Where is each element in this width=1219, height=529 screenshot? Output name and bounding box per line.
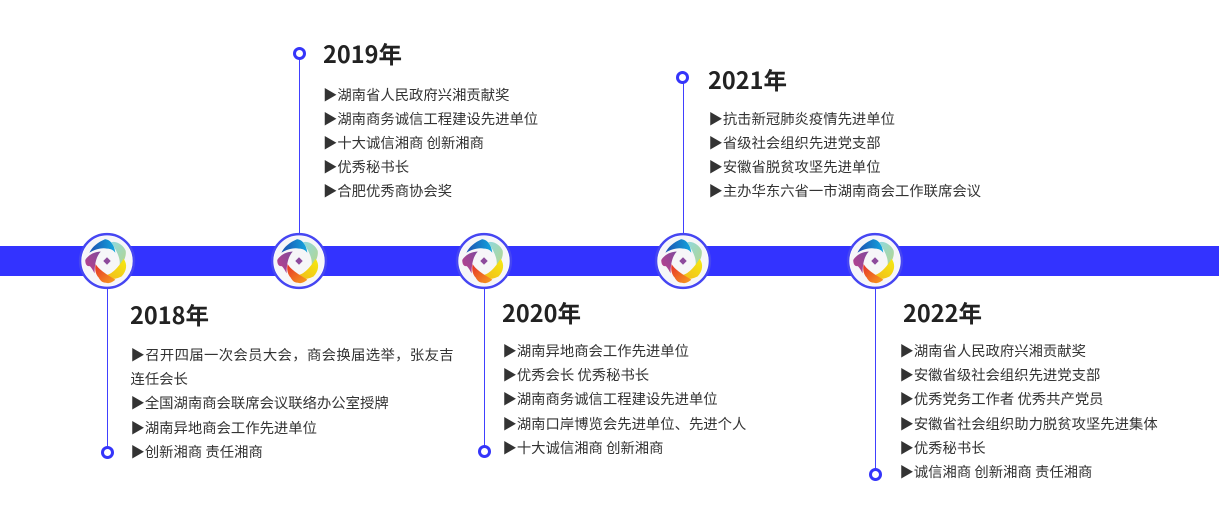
stem: 2018 [107, 285, 108, 447]
text block: 2022 awards: ▶安徽省级社会组织先进党支部 [900, 364, 1100, 385]
marker dot: 2018 [101, 446, 114, 459]
text block: 2021 awards: ▶省级社会组织先进党支部 [708, 132, 881, 153]
heading: 2021: 2021年 [708, 62, 787, 96]
text block: 2018 awards: ▶召开四届一次会员大会，商会换届选举，张友吉 [130, 344, 454, 365]
marker dot: 2021 [676, 71, 689, 84]
marker dot: 2020 [478, 445, 490, 458]
text block: 2022 awards: ▶安徽省社会组织助力脱贫攻坚先进集体 [900, 413, 1158, 434]
text block: 2022 awards: ▶优秀党务工作者 优秀共产党员 [900, 388, 1104, 409]
text block: 2020 awards [502, 340, 746, 458]
text block: 2021 awards: ▶安徽省脱贫攻坚先进单位 [708, 156, 881, 177]
text block: 2021 awards: ▶主办华东六省一市湖南商会工作联席会议 [708, 180, 981, 201]
text block: 2018 awards [130, 344, 454, 462]
text block: 2019 awards: ▶十大诚信湘商 创新湘商 [323, 132, 484, 153]
text block: 2019 awards [323, 84, 538, 201]
icon: logo 2021 [655, 232, 711, 290]
icon: logo 2022 [847, 232, 903, 290]
text block: 2019 awards: ▶合肥优秀商协会奖 [323, 180, 452, 201]
text block: 2022 awards: ▶诚信湘商 创新湘商 责任湘商 [900, 461, 1092, 482]
icon: logo 2019 [271, 232, 327, 290]
text block: 2018 awards: 连任会长 [130, 368, 188, 389]
heading: 2020: 2020年 [502, 295, 581, 329]
text block: 2020 awards: ▶湖南商务诚信工程建设先进单位 [502, 388, 718, 409]
heading: 2019: 2019年 [323, 36, 402, 70]
text block: 2020 awards: ▶湖南口岸博览会先进单位、先进个人 [502, 413, 746, 434]
icon: logo 2020 [456, 232, 512, 290]
text block: 2022 awards [900, 340, 1158, 482]
marker dot: 2022 [868, 468, 882, 481]
heading: 2022: 2022年 [903, 295, 982, 329]
text block: 2022 awards: ▶湖南省人民政府兴湘贡献奖 [900, 340, 1086, 361]
heading: 2018: 2018年 [130, 297, 209, 331]
text block: 2018 awards: ▶创新湘商 责任湘商 [130, 441, 263, 462]
text block: 2020 awards: ▶十大诚信湘商 创新湘商 [502, 437, 664, 458]
timeline bar [0, 246, 1219, 276]
text block: 2019 awards: ▶湖南省人民政府兴湘贡献奖 [323, 84, 509, 105]
stem: 2021 [683, 78, 684, 236]
text block: 2022 awards: ▶优秀秘书长 [900, 437, 986, 458]
icon: logo 2018 [79, 232, 135, 290]
text block: 2020 awards: ▶优秀会长 优秀秘书长 [502, 364, 649, 385]
stem: 2019 [299, 54, 300, 236]
text block: 2021 awards: ▶抗击新冠肺炎疫情先进单位 [708, 108, 895, 128]
text block: 2018 awards: ▶湖南异地商会工作先进单位 [130, 417, 317, 438]
stem: 2020 [484, 285, 485, 447]
text block: 2019 awards: ▶优秀秘书长 [323, 156, 409, 177]
stem: 2022 [875, 285, 876, 475]
text block: 2021 awards [708, 108, 981, 201]
text block: 2018 awards: ▶全国湖南商会联席会议联络办公室授牌 [130, 392, 389, 413]
text block: 2019 awards: ▶湖南商务诚信工程建设先进单位 [323, 108, 538, 129]
marker dot: 2019 [293, 47, 306, 60]
text block: 2020 awards: ▶湖南异地商会工作先进单位 [502, 340, 689, 361]
